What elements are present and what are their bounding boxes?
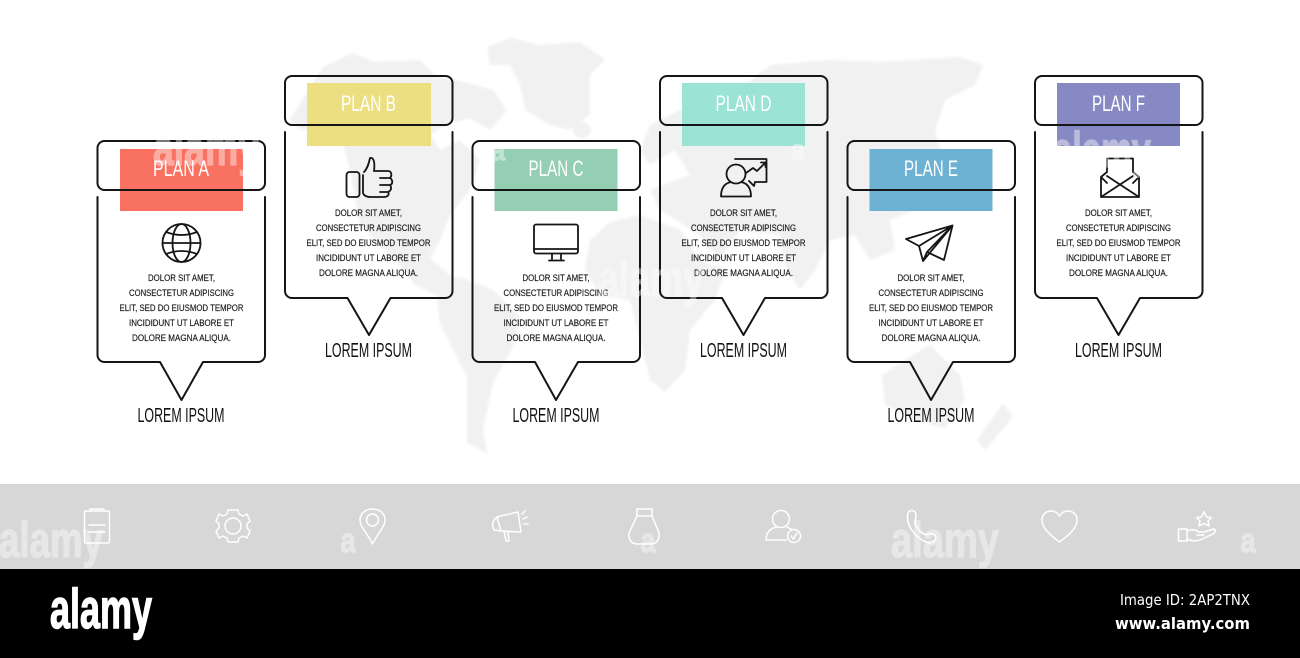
icon: megaphone [493, 511, 528, 541]
panel: Plan D: DOLOR SIT AMET, [710, 208, 777, 218]
icon: heart [1042, 511, 1077, 542]
panel: Plan E [848, 141, 1015, 427]
panel: Plan F: PLAN F [1092, 91, 1145, 116]
black footer bar [0, 569, 1300, 658]
panel: Plan D: PLAN D [716, 91, 772, 116]
panel: Plan D: CONSECTETUR ADIPISCING [691, 223, 796, 233]
panel: Plan C: ELIT, SED DO EIUSMOD TEMPOR [494, 303, 618, 313]
panel: Plan F: INCIDIDUNT UT LABORE ET [1066, 253, 1171, 263]
panel: Plan A: ELIT, SED DO EIUSMOD TEMPOR [120, 303, 244, 313]
panel: Plan B: LOREM IPSUM [325, 340, 412, 362]
panel: Plan B: DOLORE MAGNA ALIQUA. [319, 268, 418, 278]
panel: Plan E: DOLOR SIT AMET, [898, 273, 964, 283]
panel: Plan A [98, 141, 265, 427]
panel: Plan F: DOLOR SIT AMET, [1085, 208, 1152, 218]
world map background [290, 38, 1013, 453]
panel: Plan F: CONSECTETUR ADIPISCING [1066, 223, 1171, 233]
panel: Plan D: INCIDIDUNT UT LABORE ET [691, 253, 796, 263]
panel: Plan C: CONSECTETUR ADIPISCING [504, 288, 608, 298]
panel: Plan E: ELIT, SED DO EIUSMOD TEMPOR [869, 303, 993, 313]
panel: Plan A: LOREM IPSUM [138, 405, 224, 427]
panel: Plan B: CONSECTETUR ADIPISCING [316, 223, 421, 233]
alamy logo: alamy [50, 577, 152, 640]
icon: telephone [907, 510, 936, 543]
panel: Plan B: ELIT, SED DO EIUSMOD TEMPOR [306, 238, 431, 248]
watermarks: alamy [598, 251, 704, 307]
watermarks: a [491, 134, 505, 167]
panel: Plan F: ELIT, SED DO EIUSMOD TEMPOR [1056, 238, 1181, 248]
panel: Plan D: LOREM IPSUM [700, 340, 787, 362]
watermarks: a [640, 522, 656, 560]
panel: Plan B: INCIDIDUNT UT LABORE ET [316, 253, 421, 263]
panel: Plan D: DOLORE MAGNA ALIQUA. [694, 268, 793, 278]
panel: Plan A: DOLORE MAGNA ALIQUA. [132, 333, 231, 343]
watermarks: alamy [891, 512, 999, 568]
panel: Plan E: INCIDIDUNT UT LABORE ET [878, 318, 984, 328]
panel: Plan F: LOREM IPSUM [1075, 340, 1162, 362]
icon: user check [766, 510, 800, 542]
panel: Plan A: CONSECTETUR ADIPISCING [129, 288, 234, 298]
panel: Plan B: DOLOR SIT AMET, [335, 208, 402, 218]
website url: www.alamy.com [1115, 614, 1250, 633]
panel: Plan A: INCIDIDUNT UT LABORE ET [129, 318, 234, 328]
watermarks: a [1240, 522, 1256, 560]
panel: Plan A: DOLOR SIT AMET, [148, 273, 215, 283]
panel: Plan F: DOLORE MAGNA ALIQUA. [1069, 268, 1168, 278]
panel: Plan D: ELIT, SED DO EIUSMOD TEMPOR [682, 238, 806, 248]
panel: Plan E: DOLORE MAGNA ALIQUA. [882, 333, 980, 343]
panel: Plan C: PLAN C [528, 156, 584, 181]
panel: Plan A: PLAN A [153, 156, 209, 181]
watermarks: alamy [153, 120, 259, 176]
panel: Plan B: PLAN B [341, 91, 396, 116]
watermarks: alamy [1053, 122, 1151, 178]
icon: location pin [360, 509, 385, 544]
icon: money bag [629, 509, 659, 544]
icon: hand with star [1178, 512, 1215, 541]
panel: Plan C: INCIDIDUNT UT LABORE ET [504, 318, 609, 328]
icon: gear [216, 510, 250, 542]
panel: Plan D [660, 76, 828, 362]
panel: Plan C: DOLOR SIT AMET, [522, 273, 590, 283]
watermarks: alamy [0, 512, 103, 568]
watermarks: a [340, 522, 356, 560]
watermarks [0, 120, 1256, 568]
panel: Plan C: DOLORE MAGNA ALIQUA. [506, 333, 606, 343]
image id: Image ID: 2AP2TNX [1120, 591, 1250, 609]
panel: Plan E: PLAN E [904, 156, 958, 181]
panel: Plan B [285, 76, 452, 362]
panel: Plan F [1035, 76, 1202, 362]
panel: Plan E: CONSECTETUR ADIPISCING [878, 288, 984, 298]
icon: clipboard [84, 509, 110, 543]
panel: Plan E: LOREM IPSUM [888, 405, 974, 427]
watermarks: a [791, 134, 805, 167]
panel: Plan C: LOREM IPSUM [512, 405, 600, 427]
grey icon band [0, 484, 1300, 569]
panel: Plan C [472, 141, 640, 427]
